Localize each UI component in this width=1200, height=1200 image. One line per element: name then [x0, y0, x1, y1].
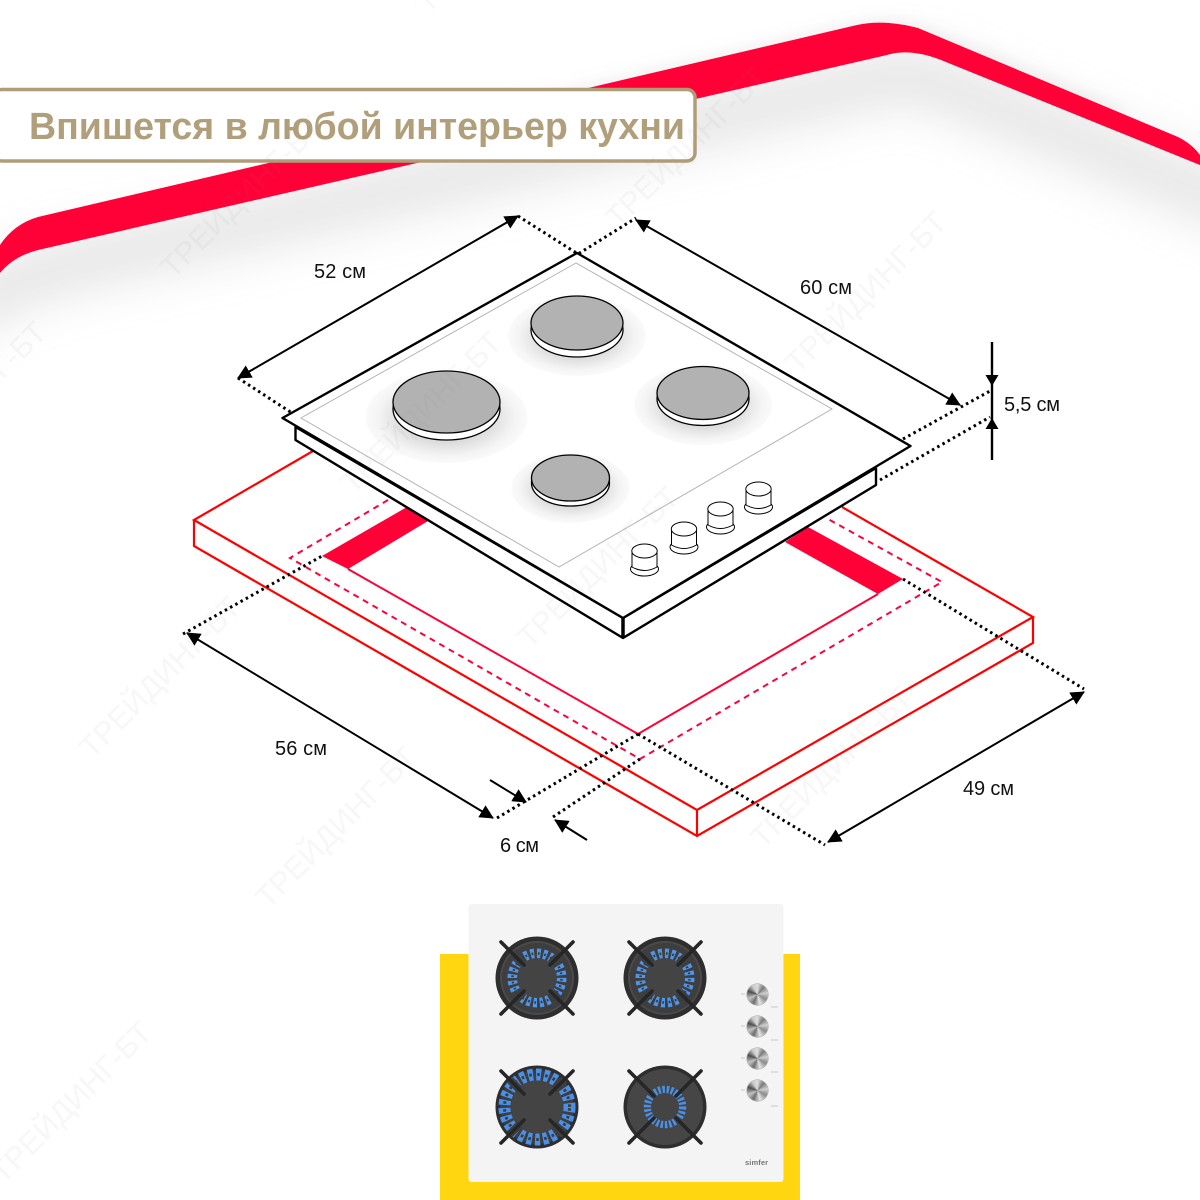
watermarks: ТРЕЙДИНГ-БТ	[509, 479, 686, 655]
burner right	[634, 365, 772, 445]
title banner: Впишется в любой интерьер кухни	[29, 106, 685, 148]
hob inner border	[301, 263, 832, 567]
hob photo panel	[468, 904, 784, 1182]
arrow 56 cm	[187, 633, 493, 818]
ribbon shadow	[0, 76, 1200, 320]
watermarks: ТРЕЙДИНГ-БТ	[332, 324, 509, 500]
burner front	[512, 453, 630, 523]
hob corner edge	[621, 618, 625, 638]
countertop outline	[194, 451, 1033, 836]
knob 1	[630, 544, 658, 576]
arrow 60 cm	[636, 220, 960, 405]
watermarks	[0, 0, 954, 1190]
burner left	[366, 371, 528, 463]
dotted extension lines	[183, 216, 1084, 845]
control knob 1	[746, 984, 768, 1004]
control knob 2	[746, 1016, 768, 1036]
label 56 cm: 56 см	[275, 738, 327, 760]
label 60 cm: 60 см	[800, 277, 852, 299]
knob 3	[706, 502, 734, 534]
burner photo bottom left	[496, 1066, 578, 1148]
cutout dashed outline	[290, 500, 942, 759]
label 5.5 cm: 5,5 см	[1004, 394, 1060, 416]
label 6 cm: 6 см	[500, 835, 539, 857]
brand logo: simfer	[745, 1158, 768, 1167]
cutout inner edge	[348, 569, 878, 734]
watermarks: ТРЕЙДИНГ-БТ	[742, 679, 919, 855]
control knob 4	[746, 1080, 768, 1100]
label 52 cm: 52 см	[314, 261, 366, 283]
watermarks: ТРЕЙДИНГ-БТ	[247, 739, 424, 915]
watermarks: ТРЕЙДИНГ-БТ	[777, 204, 954, 380]
burner photo bottom right	[624, 1066, 706, 1148]
knob 2	[670, 522, 698, 554]
knob 4	[744, 482, 772, 514]
burner photo top left	[496, 936, 578, 1020]
ribbon upper shadow	[520, 26, 1120, 115]
dimension arrows	[187, 216, 1084, 842]
yellow backdrop	[440, 954, 800, 1200]
watermarks: ТРЕЙДИНГ-БТ	[71, 589, 248, 765]
burner photo top right	[624, 936, 706, 1020]
watermarks: ТРЕЙДИНГ-БТ	[152, 109, 329, 285]
arrow 5.5 cm	[991, 342, 993, 460]
watermarks: ТРЕЙДИНГ-БТ	[597, 59, 774, 235]
countertop with cutout	[194, 451, 1033, 836]
gas hob isometric	[282, 253, 910, 638]
arrow 52 cm	[238, 216, 518, 378]
hob side faces	[296, 427, 876, 638]
red band left	[322, 507, 428, 569]
knob tick marks	[741, 994, 778, 1106]
title banner	[0, 90, 695, 161]
arrowheads 5.5 cm	[986, 375, 998, 429]
red ribbon	[0, 23, 1200, 273]
burner top	[508, 296, 646, 376]
arrow 6 cm right	[555, 820, 587, 840]
label 49 cm: 49 см	[963, 778, 1014, 800]
knobs	[630, 482, 772, 576]
red band right	[785, 527, 903, 594]
control knob 3	[746, 1048, 768, 1068]
arrow 49 cm	[828, 692, 1084, 842]
arrow 6 cm left	[490, 780, 526, 802]
hob top	[282, 253, 910, 618]
